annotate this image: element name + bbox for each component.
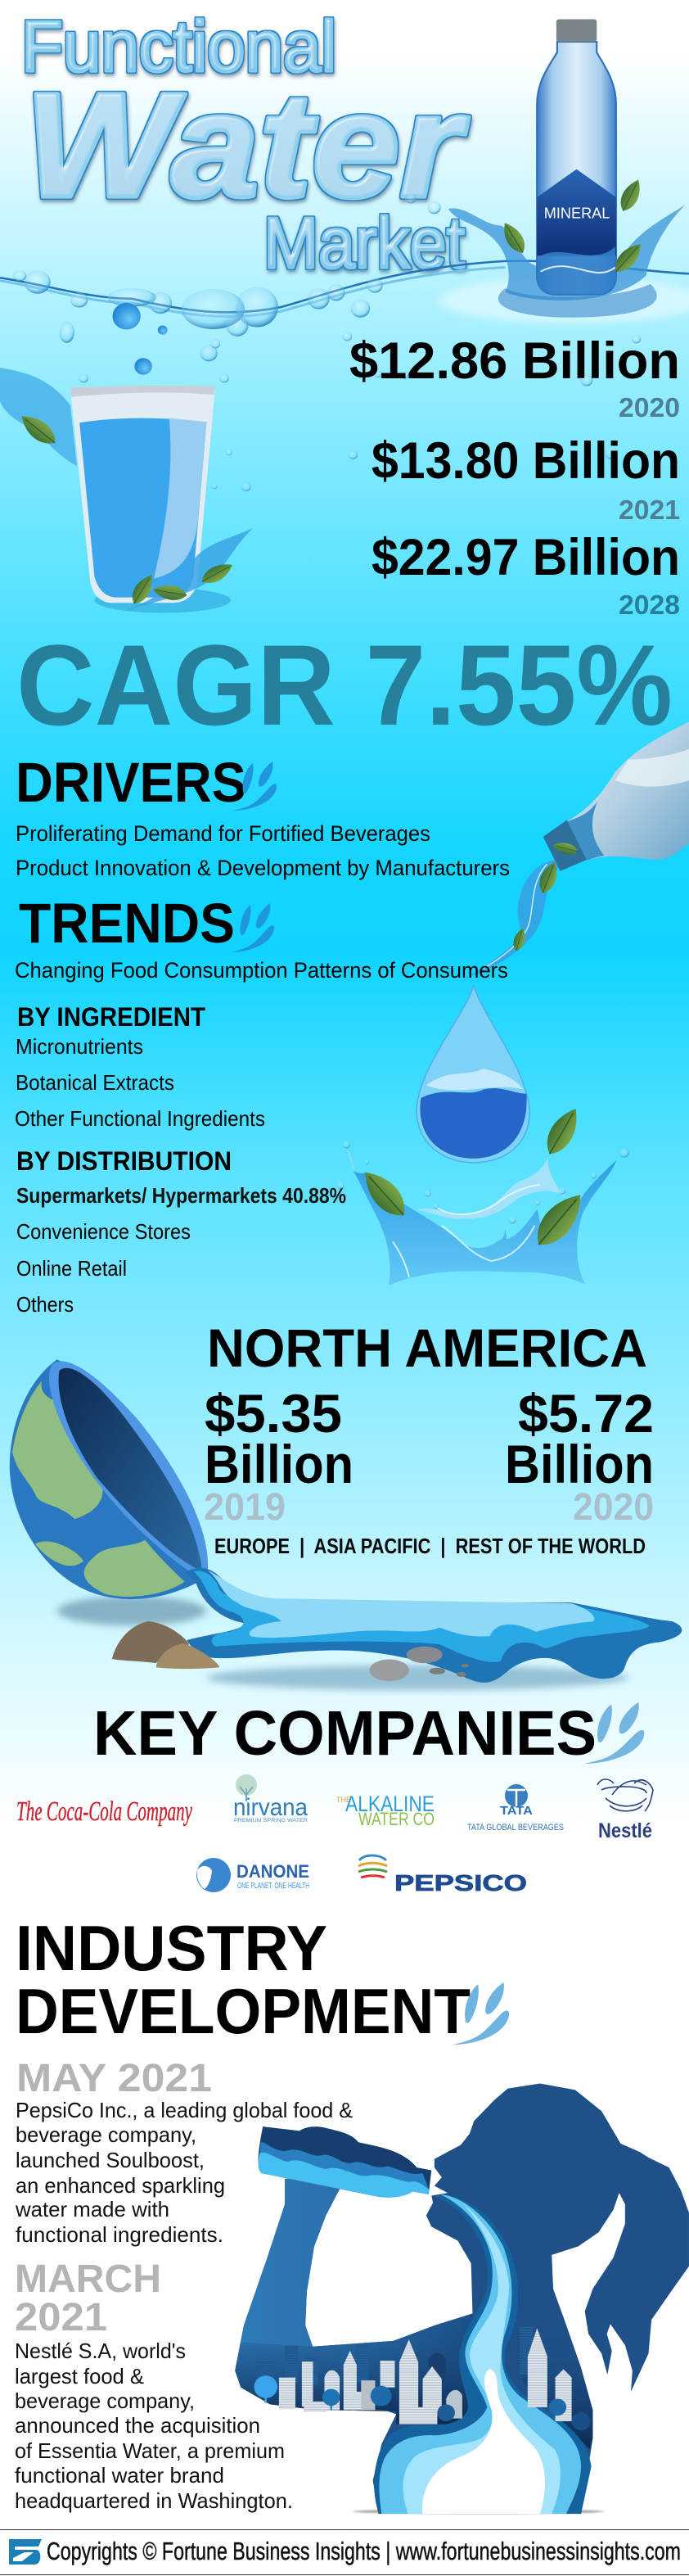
nestle wordmark: Nestlé: [598, 1819, 652, 1842]
icon: water splash: [453, 1982, 509, 2045]
pepsico globe: [358, 1855, 387, 1878]
bottle label: [537, 169, 616, 255]
icon: Fortune Business Insights logo: [9, 2539, 42, 2565]
Nestle line 5: of Essentia Water, a premium: [15, 2438, 285, 2463]
illustration: crown splash with leaves: [336, 1103, 629, 1286]
Nestle line 7: headquartered in Washington.: [15, 2488, 293, 2513]
bottle neck cap: [543, 820, 587, 871]
globe inner rim: [49, 1361, 208, 1579]
crown body: [354, 1160, 616, 1286]
driver item 2: Product Innovation & Development by Manufacturers: [16, 856, 510, 880]
water inside glass: [79, 418, 206, 598]
spilled water: [185, 1568, 682, 1683]
bottle label text: MINERAL: [544, 205, 610, 221]
ingredient: Micronutrients: Micronutrients: [16, 1034, 143, 1059]
heading line two: DEVELOPMENT: [16, 1975, 471, 2047]
year 2028: 2028: [619, 590, 680, 620]
PepsiCo line 4: an enhanced sparkling: [16, 2173, 225, 2198]
nirvana tagline: PREMIUM SPRING WATER: [234, 1819, 308, 1824]
trend item: Changing Food Consumption Patterns of Consumers: [15, 958, 508, 983]
ingredient: Other Functional Ingredients: Other Functional Ingredients: [15, 1106, 265, 1131]
upper splash band: [417, 1157, 567, 1219]
title line: Water: Water: [25, 61, 470, 228]
danone wordmark: DANONE: [236, 1861, 309, 1882]
water stream layers: [374, 2194, 592, 2514]
title: Functional Water Market: [21, 6, 470, 283]
nest emblem: [597, 1779, 653, 1811]
globe shell: [10, 1359, 206, 1599]
value 2020 unit: Billion: [505, 1434, 654, 1494]
illustration: water drop: [417, 985, 529, 1163]
logo: The Alkaline Water Co: [336, 1792, 435, 1829]
heading: By Ingredient: BY INGREDIENT: [17, 1002, 205, 1032]
glass: [70, 386, 215, 603]
date: May 2021: MAY 2021: [16, 2057, 212, 2100]
leaves: [498, 177, 646, 277]
logo: Nirvana: [233, 1774, 308, 1824]
danone emblem: [196, 1858, 231, 1892]
nirvana wordmark: nirvana: [233, 1794, 308, 1821]
heading: By Distribution: BY DISTRIBUTION: [16, 1146, 232, 1176]
year 2019: 2019: [204, 1485, 286, 1528]
2021: 2021: [15, 2296, 107, 2339]
footer rule top: [0, 2529, 689, 2530]
nirvana tree: [236, 1774, 257, 1801]
Nestle line 2: largest food &: [15, 2364, 144, 2388]
footer: logo and copyright: [9, 2537, 681, 2565]
distribution: Others: Others: [16, 1292, 74, 1317]
year 2020: 2020: [573, 1485, 654, 1528]
illustration: mineral water bottle with splash: [448, 19, 686, 318]
market value 2020: $12.86 Billion: [349, 332, 680, 390]
stream leaves: [511, 840, 579, 952]
date: March 2021: [15, 2257, 161, 2339]
Nestle line 4: announced the acquisition: [15, 2413, 260, 2438]
illustration: pouring bottle and stream: [462, 722, 689, 980]
title line: Market: Market: [263, 202, 465, 283]
distribution: Supermarkets: Supermarkets/ Hypermarkets 40.88%: [16, 1183, 346, 1208]
Nestle line 1: Nestlé S.A, world's: [15, 2339, 186, 2363]
danone tagline: ONE PLANET. ONE HEALTH: [237, 1882, 309, 1891]
splash behind glass: [0, 368, 77, 466]
distribution: Online Retail: Online Retail: [16, 1256, 127, 1281]
logo: PepsiCo: [358, 1855, 527, 1896]
value 2019 amount: $5.35: [205, 1383, 342, 1444]
silhouette body and hair: [235, 2083, 689, 2514]
PepsiCo line 3: launched Soulboost,: [16, 2148, 205, 2172]
bottle body: [567, 722, 689, 861]
paragraph: Nestle: [15, 2339, 293, 2513]
tata tagline: TATA GLOBAL BEVERAGES: [467, 1823, 564, 1833]
year 2020: 2020: [619, 392, 680, 423]
land masses: [12, 1381, 185, 1597]
heading: Drivers: DRIVERS: [16, 751, 246, 814]
alkaline line one: ALKALINE: [345, 1792, 435, 1816]
value 2019 unit: Billion: [205, 1434, 354, 1494]
logo: Nestle: [597, 1779, 653, 1842]
Nestle line 3: beverage company,: [15, 2388, 195, 2413]
illustration: glass of water: [0, 368, 253, 614]
city skyline: [257, 2327, 572, 2424]
PepsiCo line 6: functional ingredients.: [16, 2222, 223, 2247]
heading: Key Companies: KEY COMPANIES: [93, 1698, 597, 1769]
tata wordmark: TATA: [500, 1804, 533, 1818]
tata emblem: [505, 1784, 528, 1807]
logo: Tata Global Beverages: [467, 1784, 564, 1833]
footer rule bottom: [0, 2574, 689, 2575]
March: MARCH: [15, 2257, 161, 2301]
pepsico wordmark: PEPSICO: [394, 1870, 527, 1896]
icon: water splash: [584, 1702, 644, 1764]
heading: North America: NORTH AMERICA: [207, 1317, 647, 1378]
splash and leaves at base of glass: [16, 409, 253, 614]
trees: [254, 2375, 591, 2430]
bottle cap: [556, 19, 597, 42]
bottle body: [537, 42, 616, 295]
rocks: [112, 1621, 469, 1681]
icon: water splash: [233, 762, 277, 811]
driver item 1: Proliferating Demand for Fortified Beverages: [16, 821, 430, 846]
illustration: globe pouring water: [10, 1359, 682, 1690]
globe interior: [59, 1368, 202, 1571]
drinking bottle: [259, 2126, 431, 2198]
alkaline line two: WATER CO: [358, 1809, 435, 1829]
arm lighter shade: [235, 2179, 472, 2410]
title line: Functional: Functional: [21, 6, 336, 87]
Nestle line 6: functional water brand: [15, 2463, 224, 2488]
water surface with bubbles: [0, 193, 689, 491]
PepsiCo line 1: PepsiCo Inc., a leading global food &: [16, 2098, 353, 2122]
distribution: Convenience Stores: Convenience Stores: [16, 1219, 191, 1244]
paragraph: PepsiCo: [15, 2098, 353, 2247]
city night backdrop: [235, 2313, 472, 2424]
heading: Trends: TRENDS: [19, 892, 235, 955]
value 2020 amount: $5.72: [518, 1383, 654, 1444]
PepsiCo line 5: water made with: [15, 2197, 169, 2221]
logo: The Coca-Cola Company: The Coca-Cola Company: [16, 1796, 193, 1827]
ingredient: Botanical Extracts: Botanical Extracts: [16, 1070, 174, 1095]
year 2021: 2021: [619, 495, 680, 525]
logo: Danone: [196, 1858, 309, 1892]
icon: water splash: [231, 903, 274, 952]
heading line one: INDUSTRY: [16, 1912, 327, 1984]
splash leaves: [356, 1103, 591, 1254]
illustration: woman drinking water silhouette: [235, 2083, 689, 2514]
alkaline small text: THE: [336, 1796, 351, 1804]
PepsiCo line 2: beverage company,: [16, 2122, 196, 2147]
heading: Industry Development: [16, 1912, 471, 2047]
